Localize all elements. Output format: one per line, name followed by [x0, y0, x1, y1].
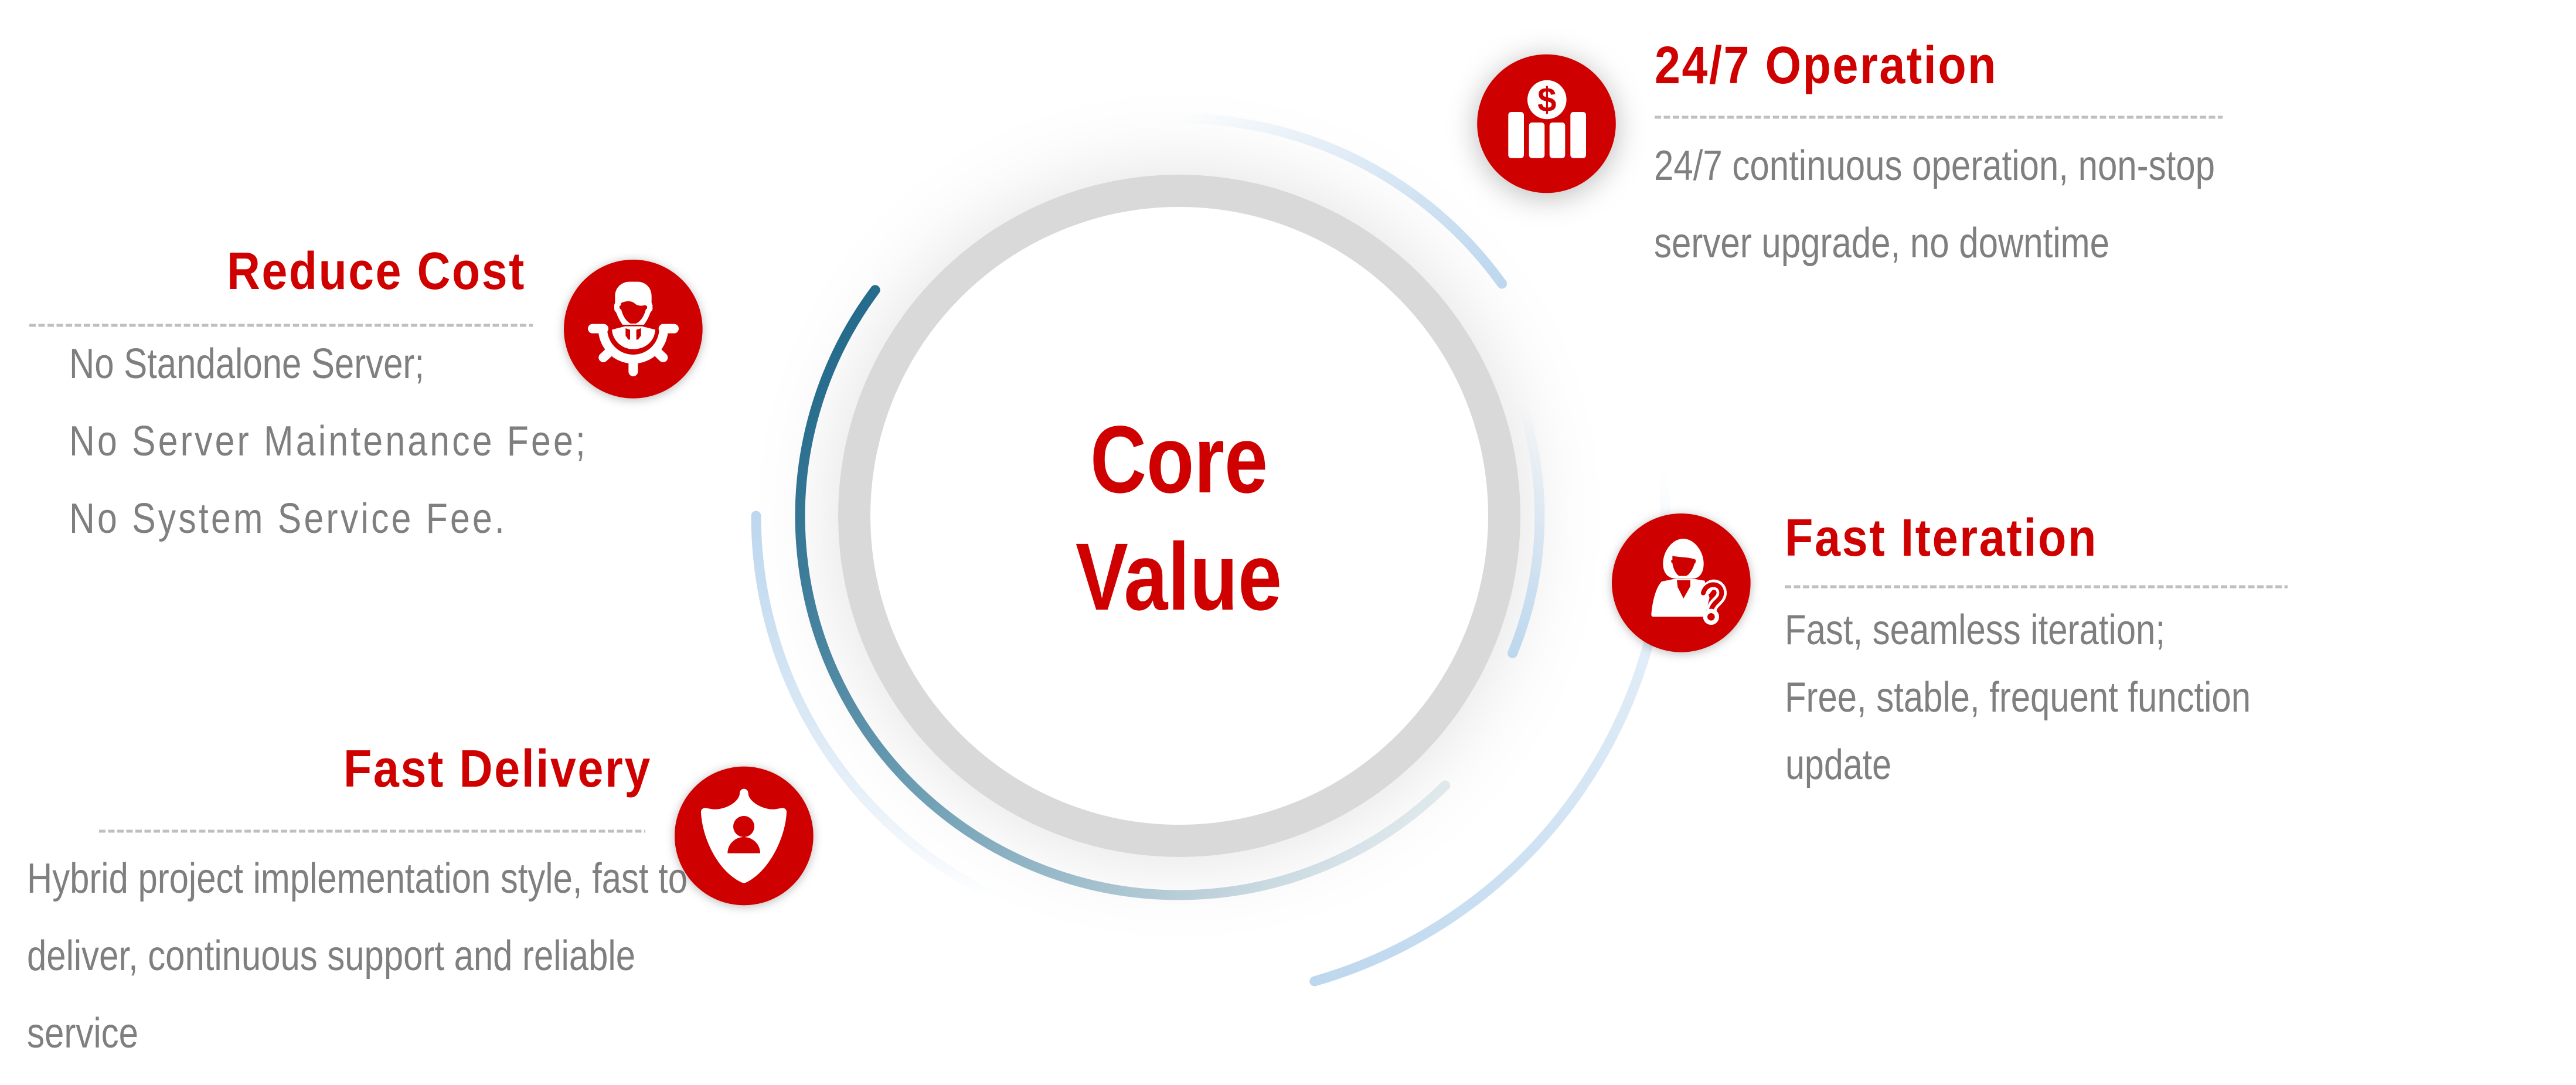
body: Fast Delivery: deliver, continuous support and reliable	[27, 933, 635, 979]
body: 24/7 Operation	[1654, 142, 2215, 267]
body: Fast Delivery: service	[27, 1010, 138, 1057]
body: Fast Delivery	[27, 855, 688, 1057]
icon: person with question mark (Fast Iteration)	[1612, 513, 1751, 652]
heading: Fast Delivery: Fast Delivery	[343, 740, 652, 798]
decorative arcs around ring	[756, 118, 1666, 981]
body: Fast Iteration	[1785, 607, 2251, 788]
icon: chart with dollar (24/7 Operation)	[1477, 55, 1616, 193]
block: Fast Iteration text	[1785, 509, 2288, 788]
body: Reduce Cost: No System Service Fee.	[69, 495, 507, 542]
center title: Core	[1090, 406, 1268, 513]
arc: small right light blue	[1513, 402, 1540, 653]
ring shadow disc	[838, 175, 1520, 857]
grey ring	[855, 191, 1504, 841]
heading: Reduce Cost: Reduce Cost	[227, 242, 526, 301]
block: 24/7 Operation text	[1654, 36, 2223, 267]
heading: 24/7 Operation: 24/7 Operation	[1655, 36, 1997, 95]
icon: person with gear (Reduce Cost)	[564, 260, 703, 399]
center title: Value	[1076, 523, 1282, 630]
icon: shield with person (Fast Delivery)	[675, 767, 814, 905]
body: Fast Iteration: Free, stable, frequent function	[1785, 674, 2251, 721]
block: Fast Delivery text	[27, 740, 688, 1057]
body: Fast Delivery: Hybrid project implementation style, fast to	[27, 855, 688, 902]
icon: chart with dollar (24/7 Operation): $	[1537, 81, 1556, 119]
body: Fast Iteration: Fast, seamless iteration;	[1785, 607, 2165, 654]
arc: left light blue	[756, 516, 987, 893]
body: 24/7 Operation: server upgrade, no downtime	[1654, 220, 2109, 267]
central ring with Core Value	[838, 175, 1520, 857]
arc: top right light blue	[1179, 118, 1502, 284]
body: Reduce Cost: No Standalone Server;	[69, 341, 424, 387]
center title	[1076, 406, 1282, 630]
arc: big lower right light blue	[1315, 469, 1666, 981]
body: Reduce Cost: No Server Maintenance Fee;	[69, 418, 588, 465]
heading: Fast Iteration: Fast Iteration	[1785, 509, 2098, 567]
body: Reduce Cost	[69, 341, 588, 542]
body: 24/7 Operation: 24/7 continuous operation, non-stop	[1654, 142, 2215, 189]
arc: dark teal gradient	[800, 290, 1445, 895]
block: Reduce Cost text	[29, 242, 588, 542]
body: Fast Iteration: update	[1785, 742, 1891, 788]
